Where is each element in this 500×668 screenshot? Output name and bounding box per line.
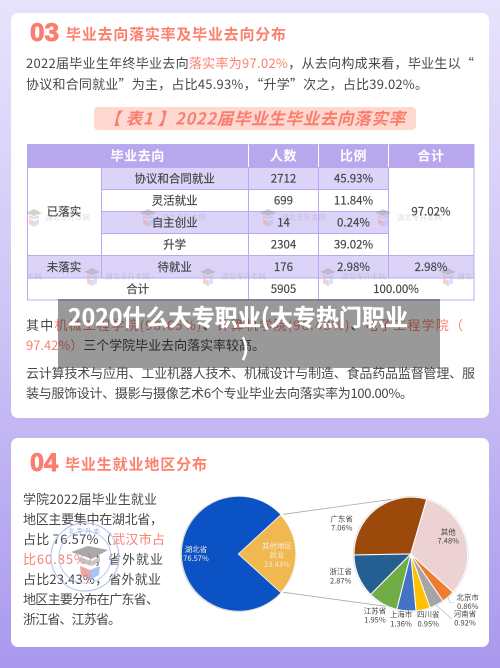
table body values: 已落实 [47,204,81,220]
title overlay banner: 2020什么大专职业(大专热门职业 [68,298,408,332]
pie labels: 7.06% [331,523,353,534]
section number 04: 04 [30,449,58,477]
table body values: 2.98% [415,259,448,275]
watermarks: 湖北专升本网 [161,212,206,223]
text block: college rates: 97.42%）三个学院毕业去向落实率较高。 [26,335,265,354]
watermarks: 湖北 [457,271,472,282]
text block: region summary: 比60.85%）；省外就业 [23,549,163,568]
pie labels: 四川省 [417,609,440,620]
watermarks: 湖北专升本网 [105,271,150,282]
watermarks: 湖北专升本网 [221,271,266,282]
text block: intro paragraph: 协议和合同就业”为主，占比45.93%，“升学”次之，占比39.02%。 [26,74,428,93]
pie: Hubei vs other regions: 湖北省 [185,544,208,555]
table body values: 2.98% [337,259,370,275]
title overlay banner: ) [241,329,249,363]
pie labels: 0.95% [418,618,439,629]
table body values: 97.02% [411,204,451,220]
panel: section 03 graduate destinations [11,13,489,418]
table body values: 未落实 [47,259,81,275]
table body values: 39.02% [334,237,374,253]
table body values: 待就业 [157,259,192,275]
title overlay banner [58,298,440,368]
pie: Hubei vs other regions [180,496,296,612]
table header row: 毕业去向 [110,146,165,164]
table body values: 176 [274,259,293,275]
pie labels: 江苏省 [364,606,387,616]
watermarks: 本网 [27,271,42,282]
table body values [47,170,451,297]
text block: intro paragraph: 2022届毕业生年终毕业去向落实率为97.02%，从去向构成来看，毕业生以“ [26,53,474,72]
table body values: 自主创业 [152,214,198,230]
pie labels: 河南省 [454,609,477,620]
text block: region summary: 浙江省、江苏省。 [23,609,121,628]
pie: Hubei vs other regions: 其他地区 [262,540,292,552]
pie labels: 北京市 [456,592,479,603]
table body values: 699 [274,192,293,208]
watermarks: 湖北专升本网 [281,212,326,223]
pie labels: 2.87% [330,575,352,586]
text block: majors with full placement: 装与服饰设计、摄影与摄像艺术6个专业毕业去向落实率为100.00%。 [26,383,413,402]
pie: Hubei vs other regions: 就业 [270,550,285,560]
table header row: 人数 [270,146,297,164]
pie labels: 7.48% [438,536,459,547]
pie: other regions breakdown [353,496,469,619]
table body values: 协议和合同就业 [134,170,215,186]
watermarks [26,209,472,286]
connector lines [283,499,398,608]
text block: region summary: 占比23.43%，省外就业 [23,569,161,588]
table title badge: 【 表1 】2022届毕业生毕业去向落实率 [104,106,408,130]
table body values: 灵活就业 [152,192,198,208]
table: 2022 graduate destination rates [26,144,474,300]
pie labels: 0.86% [457,601,479,612]
watermarks: 湖北专升本网 [45,212,90,223]
text block: region summary: 地区主要分布在广东省、 [23,589,159,608]
text block: college rates: 其中机械工程学院(98.65%)、计算机学院(98.48%)、电子工程学院（ [26,315,463,334]
panel: section 04 employment regions [11,438,489,647]
pie: Hubei vs other regions: 76.57% [183,553,209,564]
text block: intro paragraph [26,53,474,93]
pie labels [329,514,479,629]
pie labels: 1.36% [390,618,412,629]
watermarks: 湖北专升本网 [341,271,386,282]
text block: region summary: 占比 76.57%（武汉市占 [23,529,165,548]
table body values: 合计 [126,281,150,297]
chart: region pie of pie [180,496,479,629]
heading: section 03: 毕业去向落实率及毕业去向分布 [66,24,286,44]
pie labels: 上海市 [390,609,413,620]
text block: majors with full placement [26,363,475,402]
table body values: 0.24% [337,214,370,230]
text block: majors with full placement: 云计算技术与应用、工业机器人技术、机械设计与制造、食品药品监督管理、服 [26,363,475,382]
table body values: 100.00% [373,281,419,297]
heading: section 04: 毕业生就业地区分布 [65,454,207,474]
watermarks: 湖北专升本网 [397,212,442,223]
pie labels: 0.92% [454,618,476,629]
icon: graduation cap stamp: 北专升本 [68,525,102,535]
pie labels: 其他 [441,526,456,538]
icon: graduation cap stamp [51,523,119,591]
table body values: 升学 [163,237,186,253]
table header row: 合计 [417,146,445,164]
table header row [110,146,445,164]
table body values: 14 [277,214,290,230]
table body values: 11.84% [334,192,374,208]
text block: region summary: 学院2022届毕业生就业 [23,489,157,508]
text block: region summary: 地区主要集中在湖北省， [23,509,163,528]
pie labels: 浙江省 [329,566,352,577]
pie labels: 1.95% [364,615,386,626]
table header row: 比例 [340,146,367,164]
text block: college rates [26,315,463,354]
section number 03: 03 [30,19,59,47]
table body values: 5905 [271,281,296,297]
pie: Hubei vs other regions: 23.43% [264,559,290,570]
table body values: 2712 [271,170,296,186]
table body values: 2304 [271,237,297,253]
table body values: 45.93% [334,170,374,186]
text block: region summary [23,489,165,628]
pie labels: 广东省 [330,514,353,524]
